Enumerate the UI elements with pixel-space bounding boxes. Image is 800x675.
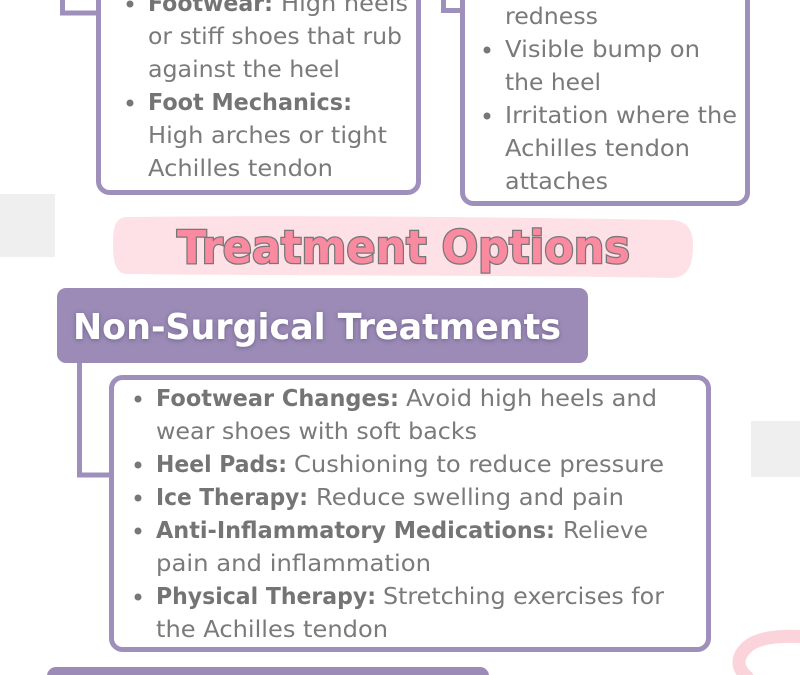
next section header (cropped) xyxy=(47,667,489,675)
heading: non-surgical treatments: Non-Surgical Treatments xyxy=(73,307,561,348)
bullet item: visible bump: the heel xyxy=(505,68,601,96)
bullet item: footwear changes: Avoid high heels and xyxy=(406,384,657,412)
bullet item: visible bump xyxy=(484,35,700,96)
bullet item: irritation xyxy=(484,101,737,195)
bullet item: anti-inflammatory medications: pain and inflammation xyxy=(156,549,431,577)
bullet item: ice therapy: Reduce swelling and pain xyxy=(316,483,624,511)
bullet item: physical therapy: Physical Therapy: xyxy=(156,582,376,610)
decorative grey square right xyxy=(751,421,800,477)
connector: symptoms xyxy=(444,0,462,10)
connector: non-surgical xyxy=(80,363,111,475)
bullet item: foot mechanics: Foot Mechanics: xyxy=(148,88,352,116)
panel: non-surgical list xyxy=(112,378,708,650)
decorative grey square left xyxy=(0,194,55,257)
bullet item: physical therapy xyxy=(134,582,664,643)
bullet item: footwear changes: wear shoes with soft backs xyxy=(156,417,477,445)
bullet item: irritation: Achilles tendon xyxy=(505,134,690,162)
bullet item: footwear xyxy=(126,0,408,83)
bullet item: physical therapy: Stretching exercises for xyxy=(383,582,664,610)
bullet item: ice therapy: Ice Therapy: xyxy=(156,483,308,511)
bullet item: footwear: or stiff shoes that rub xyxy=(148,22,402,50)
panel: symptoms list xyxy=(462,0,748,204)
heading: non-surgical treatments xyxy=(57,288,588,363)
bullet item: ice therapy xyxy=(134,483,624,511)
bullet item: visible bump: Visible bump on xyxy=(505,35,700,63)
bullet item: footwear: against the heel xyxy=(148,55,340,83)
bullet item: anti-inflammatory medications: Relieve xyxy=(563,516,648,544)
bullet item: footwear changes: Footwear Changes: xyxy=(156,384,399,412)
connector: causes xyxy=(62,0,98,13)
bullet item: footwear changes xyxy=(134,384,657,445)
bullet item: heel pads: Cushioning to reduce pressure xyxy=(294,450,664,478)
bullet item: heel pads xyxy=(134,450,664,478)
bullet item: foot mechanics: High arches or tight xyxy=(148,121,387,149)
heading: treatment options: Treatment Options xyxy=(177,221,630,274)
bullet item: foot mechanics xyxy=(126,88,387,182)
bullet item: foot mechanics: Achilles tendon xyxy=(148,154,333,182)
bullet item: heel pads: Heel Pads: xyxy=(156,450,287,478)
panel: causes list xyxy=(98,0,418,192)
bullet item: redness: redness xyxy=(505,2,598,30)
bullet item: irritation: attaches xyxy=(505,167,608,195)
bullet item: physical therapy: the Achilles tendon xyxy=(156,615,388,643)
decorative pink scribble ring xyxy=(739,636,800,675)
bullet item: irritation: Irritation where the xyxy=(505,101,737,129)
bullet item: anti-inflammatory medications: Anti-Inflammatory Medications: xyxy=(156,516,555,544)
bullet item: anti-inflammatory medications xyxy=(134,516,648,577)
